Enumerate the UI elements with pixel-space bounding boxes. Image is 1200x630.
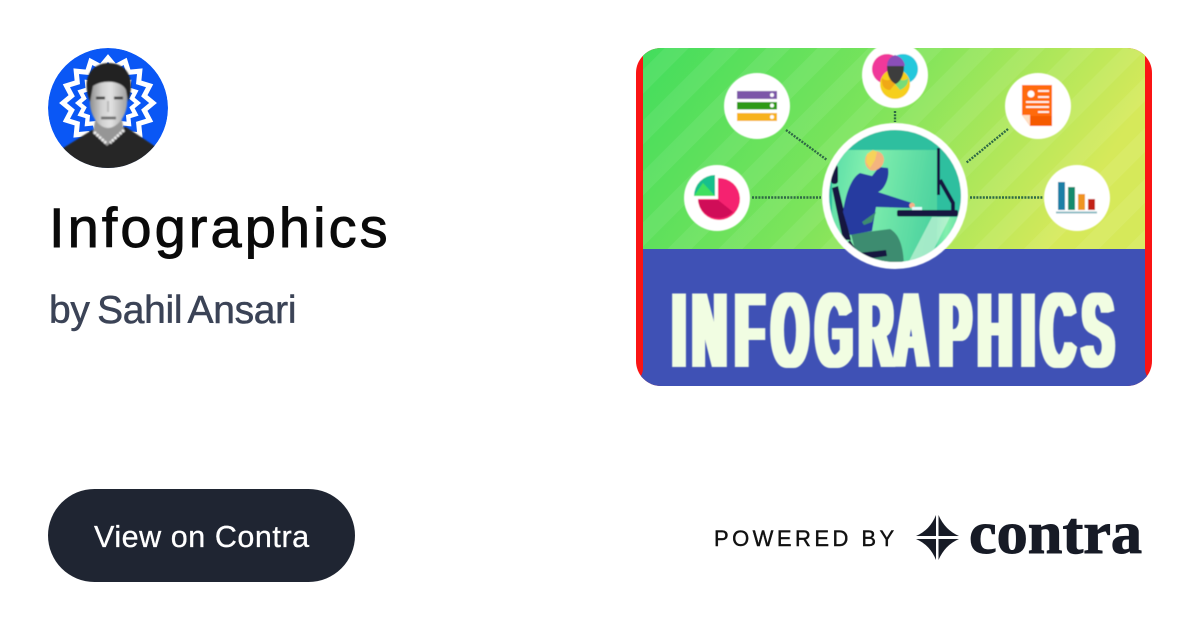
screen glow (832, 150, 937, 270)
icon: venn diagram (862, 42, 928, 108)
title: Infographics (49, 196, 391, 259)
icon: stacked list (724, 73, 790, 139)
icon: document (1005, 73, 1071, 139)
avatar jacket (62, 126, 155, 168)
logo star (916, 515, 959, 560)
button: view on contra: View on Contra (94, 520, 310, 554)
torso (843, 167, 912, 235)
author byline: by Sahil Ansari (49, 289, 296, 332)
legs (850, 228, 904, 262)
teal backdrop (828, 129, 962, 262)
green striped background (643, 48, 1145, 250)
blue banner (636, 249, 1152, 386)
icon: pie chart (684, 165, 750, 231)
avatar (48, 48, 168, 172)
desk (897, 210, 958, 216)
avatar eyes (96, 97, 123, 99)
red side bars (636, 48, 1152, 386)
avatar zigzag rings (63, 58, 153, 148)
banner wordmark: INFOGRAPHICS (672, 270, 1114, 390)
seat (846, 240, 887, 260)
avatar mouth (101, 117, 116, 119)
avatar hair (87, 63, 131, 102)
avatar neck (93, 116, 124, 146)
central illustration (822, 123, 968, 272)
head (865, 151, 884, 171)
dotted connectors (752, 111, 1043, 198)
avatar background (48, 48, 168, 168)
avatar collar (94, 130, 124, 143)
avatar face (90, 80, 128, 128)
monitor stand (937, 148, 940, 195)
chair (832, 186, 851, 240)
icon: bar chart (1044, 165, 1110, 231)
circle frame (822, 123, 968, 269)
cover image (636, 42, 1152, 390)
powered by label: POWERED BY (714, 526, 898, 551)
logo wordmark: contra (969, 500, 1142, 566)
contra logo (916, 500, 1142, 566)
arm hand (909, 203, 915, 208)
light beam (909, 216, 950, 260)
avatar nose shade (107, 101, 109, 112)
button: view on contra (48, 489, 355, 582)
avatar portrait (60, 63, 156, 172)
